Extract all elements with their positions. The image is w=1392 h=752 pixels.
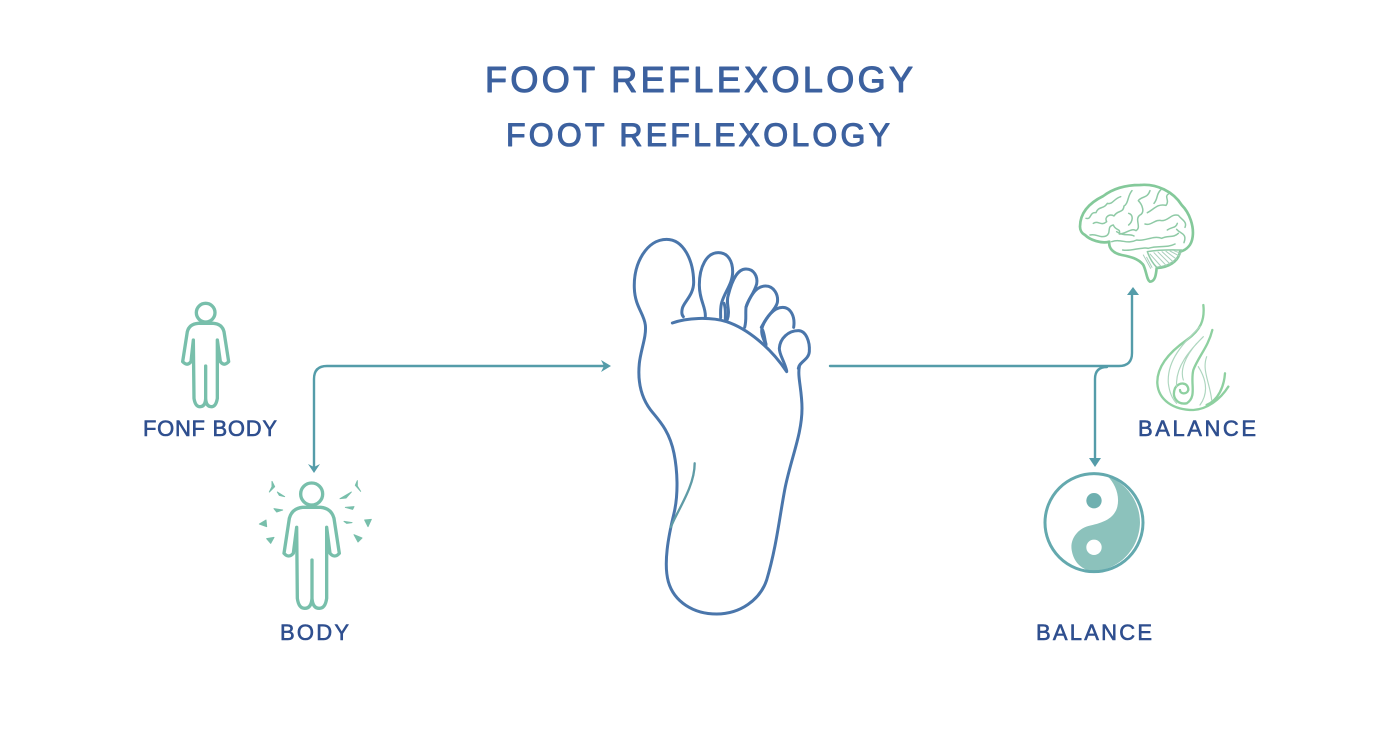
label: BALANCE (lower): BALANCE	[1036, 620, 1152, 645]
brain outline	[1080, 185, 1193, 282]
flame inner swirl	[1174, 330, 1212, 404]
flame right tongue	[1207, 373, 1225, 405]
cerebellum hatching	[1147, 250, 1182, 267]
arch line	[671, 463, 695, 527]
flame fine lines	[1168, 327, 1212, 405]
person figure	[284, 483, 339, 608]
icon: flame	[1157, 305, 1228, 410]
foot sole and big toe contour	[634, 239, 802, 614]
third toe	[727, 269, 757, 327]
ball of foot curve	[672, 318, 787, 372]
little toe	[779, 331, 809, 371]
label: BALANCE (upper): BALANCE	[1138, 416, 1256, 441]
flame outer contour	[1157, 305, 1228, 410]
brain folds	[1086, 190, 1186, 250]
icon: person with energy sparks	[259, 481, 371, 608]
arrow: foot out to brain and balance	[830, 287, 1139, 467]
title: first line: FOOT REFLEXOLOGY	[485, 59, 913, 100]
icon: foot outline	[634, 239, 809, 614]
label: FONF BODY: FONF BODY	[143, 416, 277, 441]
toe web	[724, 303, 766, 344]
label: BODY: BODY	[280, 620, 349, 645]
icon: small person	[183, 303, 229, 407]
second toe	[699, 253, 733, 318]
energy sparks	[259, 481, 371, 543]
arrow: into foot from left	[308, 360, 611, 473]
icon: brain	[1080, 185, 1193, 282]
fifth toe	[761, 307, 794, 327]
icon: yin yang	[1045, 474, 1143, 572]
fourth toe	[746, 286, 778, 345]
title: second line: FOOT REFLEXOLOGY	[506, 117, 890, 153]
hatch lines	[1143, 251, 1181, 268]
